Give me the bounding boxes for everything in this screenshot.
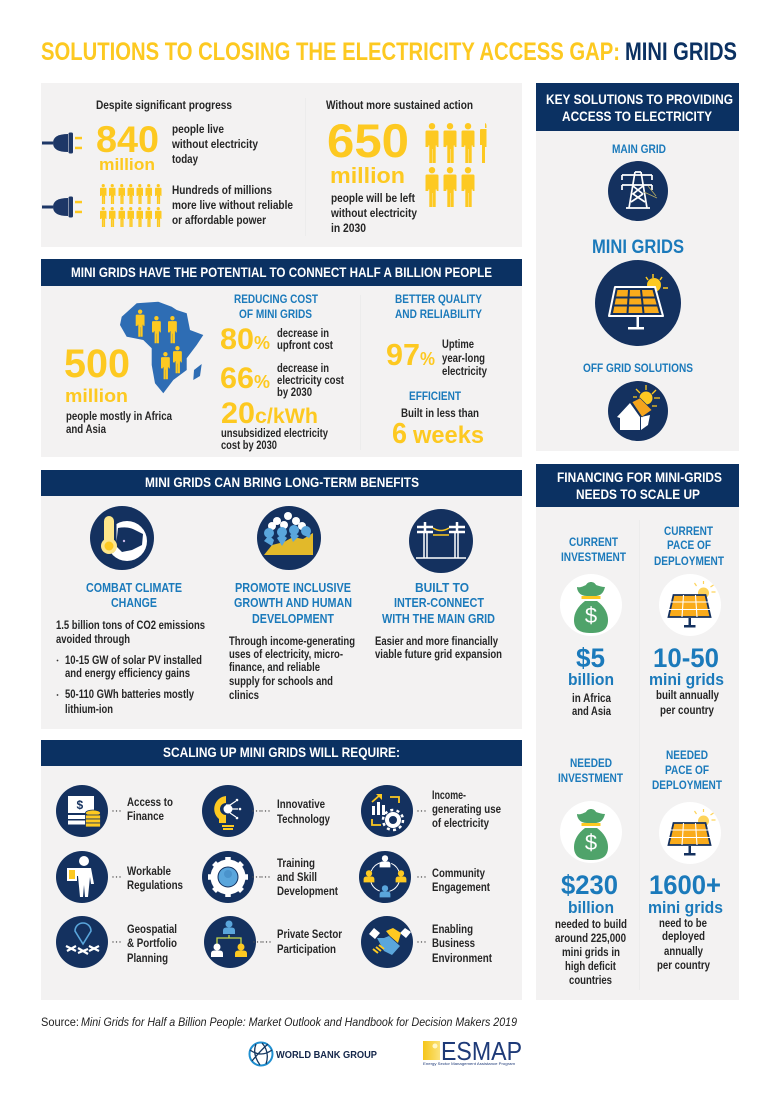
text: people will be left: people will be left xyxy=(331,193,415,205)
text: people live without electricity today: today xyxy=(172,154,199,166)
panel: key solutions xyxy=(536,83,739,451)
icon: Africa map with people xyxy=(120,302,203,393)
header bar: KEY SOLUTIONS TO PROVIDING xyxy=(546,91,733,107)
item: community engagement: Engagement xyxy=(432,882,490,894)
text: people live without electricity today: without electricity xyxy=(171,139,259,151)
item: workable regulations: Workable xyxy=(127,866,171,878)
stat: 80 percent: upfront cost xyxy=(277,340,333,352)
panel: scaling up requirements xyxy=(41,740,522,1000)
header bar xyxy=(41,259,522,286)
item: access to finance: $ xyxy=(76,798,84,812)
logo: ESMAP: ESMAP xyxy=(441,1036,522,1066)
block: needed investment: high deficit xyxy=(565,961,616,973)
block: current investment: billion xyxy=(568,670,614,689)
icon: solar house xyxy=(608,381,668,441)
item: private sector participation: Private Sector xyxy=(277,929,342,941)
heading: off grid solutions: OFF GRID SOLUTIONS xyxy=(583,363,693,375)
heading: better quality and reliability: AND RELIABILITY xyxy=(395,309,482,321)
header bar: NEEDS TO SCALE UP xyxy=(576,486,700,502)
column: promote inclusive growth: supply for schools and xyxy=(229,676,333,688)
block: current investment: INVESTMENT xyxy=(561,552,626,564)
block: needed investment: billion xyxy=(568,898,614,917)
block: current pace of deployment: per country xyxy=(660,705,715,717)
header bar xyxy=(41,740,522,766)
text: hundreds of millions: or affordable power xyxy=(172,215,266,227)
text: hundreds of millions: more live without reliable xyxy=(172,200,293,212)
text: people will be left: in 2030 xyxy=(331,223,366,235)
text: hundreds of millions: Hundreds of millions xyxy=(172,185,272,197)
block: needed investment xyxy=(555,758,627,987)
stat: 80 percent: decrease in xyxy=(277,328,329,340)
item: enabling business environment xyxy=(361,916,492,968)
stat: 500 million xyxy=(64,342,130,406)
panel: financing xyxy=(536,464,739,1000)
column: combat climate change xyxy=(56,581,205,716)
block: needed pace of deployment: mini grids xyxy=(648,898,723,917)
title: MINI GRIDS xyxy=(625,38,737,66)
column: built to inter-connect: INTER-CONNECT xyxy=(394,596,484,610)
item: income-generating use xyxy=(361,785,501,837)
icon: power lines xyxy=(409,509,473,573)
text: people will be left: without electricity xyxy=(330,208,418,220)
text: people mostly in Africa and Asia xyxy=(66,411,173,436)
stat: 97 percent: Uptime xyxy=(442,339,474,351)
item: access to finance: Access to xyxy=(127,797,173,809)
column: promote inclusive growth: finance, and reliable xyxy=(229,662,320,674)
block: current pace of deployment: 10-50 xyxy=(653,643,719,673)
icon: transmission tower xyxy=(608,161,668,221)
icon: plug top xyxy=(42,132,82,154)
block: needed pace of deployment xyxy=(648,750,723,972)
stat: 97 percent: % xyxy=(420,349,435,369)
panel: long-term benefits xyxy=(41,470,522,729)
header bar: FINANCING FOR MINI-GRIDS xyxy=(557,469,722,485)
block: needed investment: $ xyxy=(585,830,597,855)
text: people live without electricity today: people live xyxy=(172,124,224,136)
column: promote inclusive growth: GROWTH AND HUMAN xyxy=(234,596,352,610)
source note: Mini Grids for Half a Billion People: Market Outlook and Handbook for Decision Makers 2019 xyxy=(81,1015,517,1029)
header bar xyxy=(536,83,739,131)
item: geospatial planning: Geospatial xyxy=(127,924,177,936)
logo: World Bank Group xyxy=(250,1042,377,1066)
block: needed pace of deployment: NEEDED xyxy=(666,750,708,762)
item: geospatial planning: Planning xyxy=(127,953,168,965)
stat: 6 weeks: 6 xyxy=(392,418,407,450)
source note: Source: xyxy=(41,1015,79,1029)
item: access to finance xyxy=(56,785,173,837)
item: training and skill development: Development xyxy=(277,886,338,898)
item: innovative technology: Technology xyxy=(277,814,330,826)
block: current pace of deployment: PACE OF xyxy=(667,540,711,552)
icon: solar panel large xyxy=(595,260,681,346)
column: combat climate change: avoided through xyxy=(56,634,130,646)
block: current pace of deployment: DEPLOYMENT xyxy=(654,556,724,568)
column: promote inclusive growth: PROMOTE INCLUSIVE xyxy=(235,581,351,595)
icon: thermometer and globe xyxy=(90,506,154,570)
block: current pace of deployment: CURRENT xyxy=(664,526,713,538)
item: private sector participation xyxy=(204,916,342,968)
text: people mostly in Africa and Asia: people mostly in Africa xyxy=(66,411,173,423)
heading: reducing cost: OF MINI GRIDS xyxy=(239,309,312,321)
stat: 650 million: million xyxy=(330,163,405,188)
column: promote inclusive growth xyxy=(229,581,355,702)
text: people will be left xyxy=(330,193,418,235)
stat: 80 percent xyxy=(220,323,333,356)
stat: 80 percent: 80 xyxy=(220,323,254,356)
stat: 6 weeks: weeks xyxy=(412,422,484,449)
block: needed pace of deployment: PACE OF xyxy=(665,765,709,777)
item: income-generating use: of electricity xyxy=(432,818,490,830)
header bar xyxy=(536,464,739,507)
text: people mostly in Africa and Asia: and Asia xyxy=(66,424,106,436)
item: workable regulations xyxy=(56,851,183,903)
stat: 20c/kWh: c/kWh xyxy=(255,405,318,428)
item: geospatial planning xyxy=(56,916,177,968)
item: workable regulations: Regulations xyxy=(127,880,183,892)
column: combat climate change: COMBAT CLIMATE xyxy=(86,581,182,595)
heading: reducing cost: REDUCING COST xyxy=(234,294,318,306)
column: promote inclusive growth: uses of electricity, micro- xyxy=(229,649,343,661)
text: hundreds of millions xyxy=(172,185,293,227)
block: needed investment: around 225,000 xyxy=(555,933,626,945)
item: enabling business environment: Business xyxy=(432,938,475,950)
block: needed investment: NEEDED xyxy=(570,758,612,770)
text: people live without electricity today xyxy=(171,124,259,166)
block: current investment: and Asia xyxy=(572,706,611,718)
stat: 66 percent: by 2030 xyxy=(277,387,312,399)
stat: 20c/kWh: unsubsidized electricity xyxy=(221,428,328,440)
heading: despite significant progress: Despite significant progress xyxy=(96,100,232,112)
stat: 97 percent: 97 xyxy=(386,338,420,372)
block: current pace of deployment: built annually xyxy=(656,690,720,702)
header bar: MINI GRIDS HAVE THE POTENTIAL TO CONNECT HALF A BILLION PEOPLE xyxy=(71,264,492,280)
block: needed pace of deployment: 1600+ xyxy=(649,870,721,900)
column: built to inter-connect: viable future grid expansion xyxy=(375,649,502,661)
stat: 840 million: million xyxy=(99,156,155,174)
stat: 66 percent: % xyxy=(254,372,270,392)
column: combat climate change: and energy efficiency gains xyxy=(65,668,190,680)
icon: small people grid xyxy=(100,184,162,227)
stat: 500 million: 500 xyxy=(64,342,130,386)
block: needed investment: INVESTMENT xyxy=(558,773,623,785)
heading: efficient: EFFICIENT xyxy=(409,391,461,403)
block: needed investment: $230 xyxy=(561,870,618,900)
panel: potential to connect half a billion people xyxy=(41,259,522,457)
item: training and skill development: and Skill xyxy=(277,872,317,884)
stat: 20c/kWh xyxy=(221,397,328,452)
column: promote inclusive growth: DEVELOPMENT xyxy=(252,612,334,626)
stat: 66 percent: 66 xyxy=(220,362,254,395)
column: built to inter-connect: WITH THE MAIN GRID xyxy=(382,612,495,626)
column: promote inclusive growth: clinics xyxy=(229,690,259,702)
header bar xyxy=(41,470,522,496)
item: private sector participation: Participation xyxy=(277,944,336,956)
item: community engagement xyxy=(359,851,490,903)
column: combat climate change: 50-110 GWh batteries mostly xyxy=(65,689,194,701)
block: needed investment: needed to build xyxy=(555,919,627,931)
stat: 20c/kWh: 20 xyxy=(221,397,255,430)
stat: 80 percent: % xyxy=(254,333,270,353)
item: geospatial planning: & Portfolio xyxy=(127,938,177,950)
block: needed investment: countries xyxy=(569,975,612,987)
icon: large people group xyxy=(426,123,487,207)
block: needed pace of deployment: per country xyxy=(657,960,711,972)
block: current investment: in Africa xyxy=(572,693,612,705)
block: needed pace of deployment: need to be xyxy=(659,918,707,930)
column: combat climate change: lithium-ion xyxy=(65,704,113,716)
column: combat climate change: CHANGE xyxy=(111,596,157,610)
block: needed pace of deployment: annually xyxy=(664,946,704,958)
logo: ESMAP: Energy Sector Management Assistance Program xyxy=(423,1062,515,1066)
block: needed investment: mini grids in xyxy=(562,947,620,959)
icon: people and growth xyxy=(257,506,321,570)
panel: electricity access today and in 2030 xyxy=(41,83,522,247)
block: current pace of deployment xyxy=(649,526,724,717)
stat: 97 percent: electricity xyxy=(442,366,488,378)
heading: reducing cost xyxy=(234,294,318,321)
icon: plug bottom xyxy=(42,196,82,218)
block: current investment: $5 xyxy=(576,643,605,673)
logo: World Bank Group: WORLD BANK GROUP xyxy=(276,1049,377,1061)
stat: 97 percent xyxy=(386,338,488,378)
item: income-generating use: generating use xyxy=(432,804,501,816)
header bar: ACCESS TO ELECTRICITY xyxy=(562,108,713,124)
item: innovative technology: Innovative xyxy=(277,799,325,811)
heading: without more sustained action: Without more sustained action xyxy=(326,100,473,112)
item: enabling business environment: Environment xyxy=(432,953,492,965)
block: needed pace of deployment: deployed xyxy=(662,931,705,943)
stat: 500 million: million xyxy=(65,385,128,406)
stat: 97 percent: year-long xyxy=(442,353,485,365)
header bar: SCALING UP MINI GRIDS WILL REQUIRE: xyxy=(163,744,400,760)
heading: better quality and reliability: BETTER QUALITY xyxy=(395,294,482,306)
stat: 66 percent xyxy=(220,362,344,399)
column: built to inter-connect xyxy=(375,581,502,661)
item: community engagement: Community xyxy=(432,868,486,880)
item: access to finance: Finance xyxy=(127,811,164,823)
stat: 66 percent: electricity cost xyxy=(277,375,344,387)
column: built to inter-connect: BUILT TO xyxy=(415,581,469,595)
column: promote inclusive growth: Through income-generating xyxy=(229,636,355,648)
heading: main grid: MAIN GRID xyxy=(612,144,666,156)
stat: 650 million: 650 xyxy=(327,114,409,167)
title: SOLUTIONS TO CLOSING THE ELECTRICITY ACCESS GAP: xyxy=(41,38,620,66)
stat: 650 million xyxy=(327,114,409,188)
item: innovative technology xyxy=(202,785,330,837)
stat: 840 million: 840 xyxy=(96,119,159,160)
header bar: MINI GRIDS CAN BRING LONG-TERM BENEFITS xyxy=(145,474,419,490)
item: income-generating use: Income- xyxy=(432,790,466,802)
column: built to inter-connect: Easier and more financially xyxy=(375,636,498,648)
stat: 66 percent: decrease in xyxy=(277,363,329,375)
heading: better quality and reliability xyxy=(395,294,482,321)
stat: 20c/kWh: cost by 2030 xyxy=(221,440,277,452)
block: current investment: CURRENT xyxy=(569,537,618,549)
item: training and skill development: Training xyxy=(277,858,315,870)
block: current investment xyxy=(560,537,626,718)
item: enabling business environment: Enabling xyxy=(432,924,473,936)
column: combat climate change: 10-15 GW of solar PV installed xyxy=(65,655,202,667)
column: combat climate change: 1.5 billion tons of CO2 emissions xyxy=(56,620,205,632)
block: current investment: $ xyxy=(585,603,597,628)
stat: 6 weeks xyxy=(392,408,484,450)
heading: mini grids: MINI GRIDS xyxy=(592,237,684,258)
block: current pace of deployment: mini grids xyxy=(649,670,724,689)
stat: 6 weeks: Built in less than xyxy=(401,408,479,420)
block: needed pace of deployment: DEPLOYMENT xyxy=(652,780,722,792)
item: training and skill development xyxy=(202,851,338,903)
